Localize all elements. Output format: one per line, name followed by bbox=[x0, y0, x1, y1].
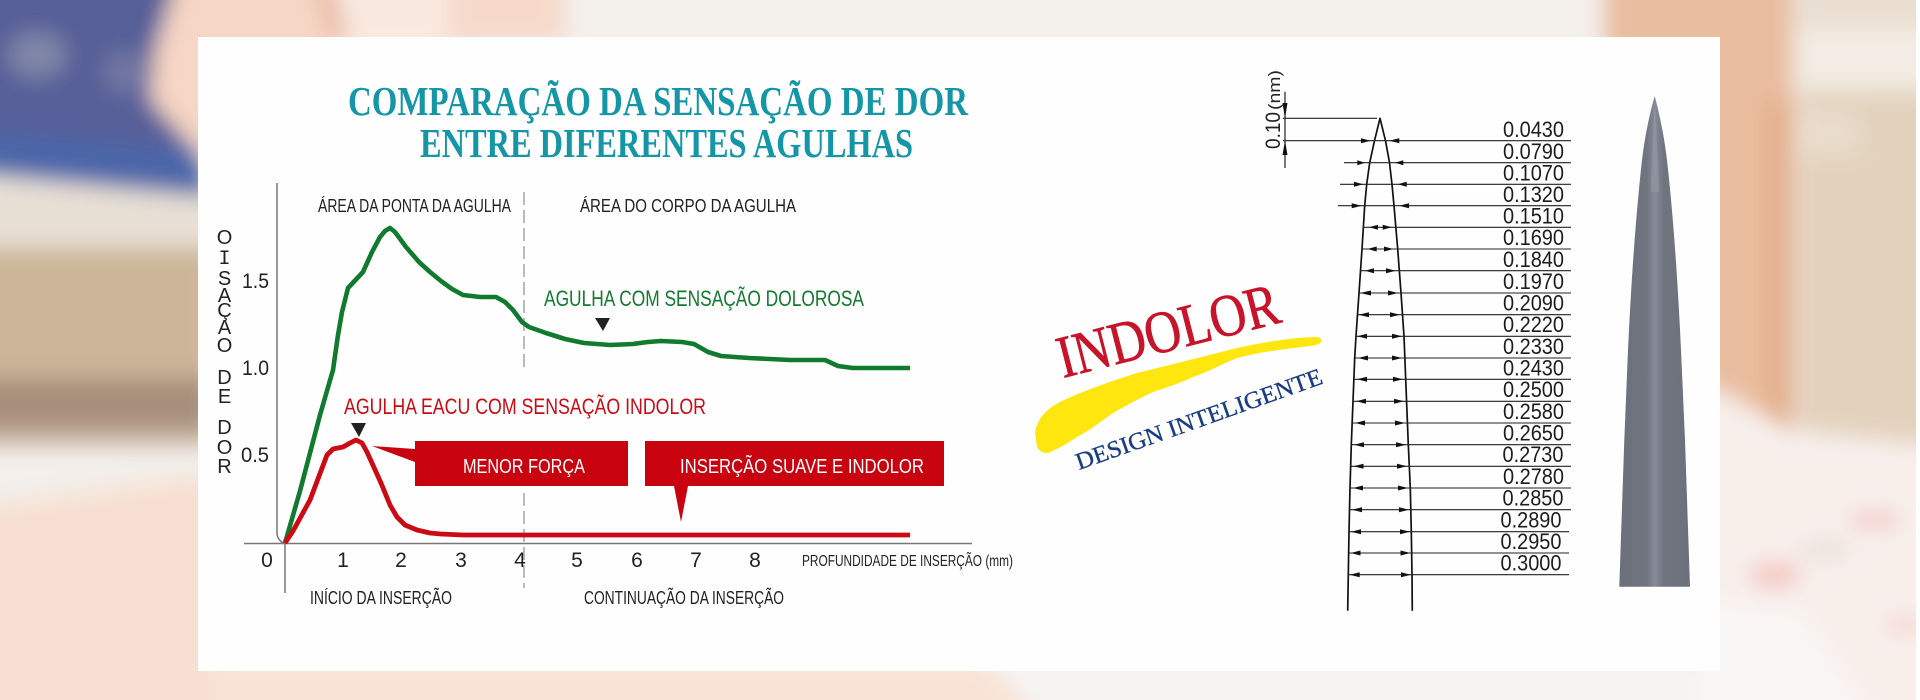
callout: menor força bbox=[372, 441, 628, 486]
callout: menor força: MENOR FORÇA bbox=[463, 456, 586, 478]
diameter values: 0.1320 bbox=[1503, 182, 1564, 207]
diameter values: 0.1970 bbox=[1503, 269, 1564, 294]
x axis ticks: 5 bbox=[571, 549, 583, 572]
diameter values: 0.1690 bbox=[1503, 225, 1564, 250]
y axis ticks: 0.5 bbox=[241, 444, 269, 467]
diameter values: 0.1840 bbox=[1503, 247, 1564, 272]
region labels bbox=[310, 196, 796, 608]
x axis ticks: 3 bbox=[455, 549, 467, 572]
callout: inserção suave e indolor: INSERÇÃO SUAVE E INDOLOR bbox=[680, 454, 924, 478]
marker: red curve bbox=[351, 423, 366, 437]
diameter values: 0.2780 bbox=[1503, 464, 1564, 489]
diameter values: 0.2950 bbox=[1500, 529, 1562, 554]
x axis title: PROFUNDIDADE DE INSERÇÃO (mm) bbox=[802, 550, 1013, 570]
x axis ticks: 2 bbox=[395, 549, 407, 572]
title line 1: COMPARAÇÃO DA SENSAÇÃO DE DOR bbox=[348, 78, 968, 124]
diameter values: 0.2850 bbox=[1502, 486, 1564, 510]
region labels: INÍCIO DA INSERÇÃO bbox=[310, 587, 452, 608]
chart: pain sensation vs insertion depth bbox=[217, 183, 1013, 608]
green curve: painful needle bbox=[285, 228, 910, 543]
red curve label: AGULHA EACU COM SENSAÇÃO INDOLOR bbox=[344, 394, 706, 419]
logo: indolor bbox=[1035, 271, 1326, 476]
right white edge strip bbox=[1916, 0, 1920, 700]
panel: white card bbox=[198, 37, 1720, 671]
x axis ticks: 7 bbox=[690, 549, 702, 572]
divider dashed at 4 mm bbox=[523, 192, 525, 588]
logo word: INDOLOR bbox=[1050, 271, 1286, 391]
dimension arrows bbox=[1350, 138, 1411, 577]
logo tagline: DESIGN INTELIGENTE bbox=[1072, 364, 1326, 476]
dimension lines bbox=[1283, 118, 1571, 575]
diameter values: 0.2500 bbox=[1503, 377, 1564, 402]
needle 3D render bbox=[1619, 96, 1690, 587]
diameter values: 0.2580 bbox=[1503, 399, 1564, 424]
diameter values: 0.2220 bbox=[1503, 312, 1564, 337]
y axis bbox=[277, 183, 285, 593]
x axis ticks bbox=[261, 549, 761, 572]
diameter values: 0.2890 bbox=[1500, 508, 1562, 532]
y axis ticks: 1.0 bbox=[242, 357, 269, 380]
y axis title: O ISAÇAO DE DOR bbox=[217, 227, 232, 478]
x axis ticks: 6 bbox=[631, 549, 643, 572]
x axis bbox=[244, 542, 972, 544]
marker: green curve bbox=[595, 318, 610, 331]
red curve: painless needle bbox=[285, 440, 910, 543]
callout: inserção suave e indolor bbox=[645, 441, 944, 522]
title line 2: ENTRE DIFERENTES AGULHAS bbox=[420, 120, 913, 166]
technical drawing: needle tip dimensions bbox=[1262, 70, 1571, 611]
x axis ticks: 1 bbox=[337, 549, 349, 572]
y axis ticks: 1.5 bbox=[242, 270, 269, 293]
needle outline bbox=[1348, 118, 1412, 611]
diameter values bbox=[1500, 117, 1564, 576]
y axis ticks bbox=[241, 270, 269, 467]
tip length dimension bbox=[1262, 70, 1288, 168]
diameter values: 0.0430 bbox=[1503, 117, 1564, 142]
diameter values: 0.3000 bbox=[1500, 550, 1562, 576]
region labels: ÁREA DO CORPO DA AGULHA bbox=[580, 196, 796, 216]
x axis ticks: 8 bbox=[749, 549, 761, 572]
diameter values: 0.2090 bbox=[1503, 290, 1564, 316]
x axis ticks: 0 bbox=[261, 549, 273, 572]
diameter values: 0.1070 bbox=[1503, 160, 1564, 186]
diameter values: 0.1510 bbox=[1503, 204, 1564, 228]
title bbox=[348, 78, 968, 166]
diameter values: 0.2430 bbox=[1503, 356, 1564, 380]
diameter values: 0.0790 bbox=[1503, 139, 1564, 164]
needle tip highlight bbox=[1650, 100, 1660, 192]
tip length dimension: (nm) bbox=[1265, 70, 1284, 110]
region labels: CONTINUAÇÃO DA INSERÇÃO bbox=[584, 587, 784, 608]
region labels: ÁREA DA PONTA DA AGULHA bbox=[318, 196, 511, 216]
green curve label: AGULHA COM SENSAÇÃO DOLOROSA bbox=[544, 286, 864, 311]
yellow swoosh bbox=[1035, 337, 1322, 453]
diameter values: 0.2650 bbox=[1503, 420, 1564, 446]
diameter values: 0.2330 bbox=[1503, 334, 1564, 359]
x axis ticks: 4 bbox=[514, 549, 526, 572]
diameter values: 0.2730 bbox=[1502, 442, 1564, 467]
tip length dimension: 0.10 bbox=[1262, 112, 1285, 149]
